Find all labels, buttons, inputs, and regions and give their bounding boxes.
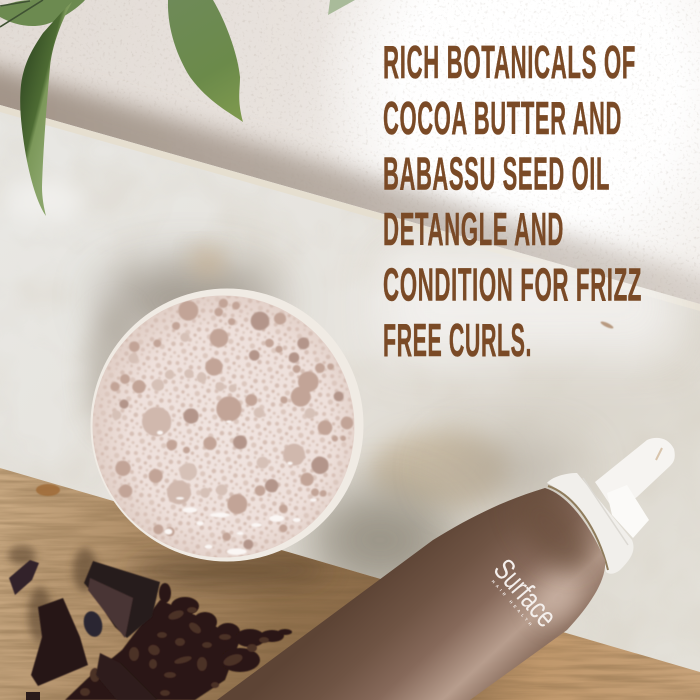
leaf: broad centre — [168, 0, 243, 122]
bottle logo: Surface — [487, 553, 563, 634]
chocolate cast shadows — [8, 545, 97, 643]
bowl rim — [90, 288, 364, 562]
foam bowl — [90, 288, 363, 562]
bottle logo — [485, 553, 563, 635]
leaf: long narrow — [20, 2, 72, 216]
leaf: stem — [0, 0, 43, 27]
bottle body — [217, 488, 605, 700]
bottle collar — [547, 473, 634, 574]
headline text — [383, 36, 642, 366]
dark cocoa bean — [81, 609, 105, 639]
spray bottle — [217, 438, 675, 700]
dark chocolate square — [84, 561, 160, 638]
leaves — [0, 0, 355, 216]
cocoa nib pile — [65, 583, 292, 700]
chocolate crumb — [26, 692, 40, 700]
foam bubbles — [90, 293, 357, 560]
wooden board — [0, 460, 700, 700]
dark chocolate piece left — [31, 598, 88, 686]
bottle collar inner edge — [548, 486, 608, 570]
leaf: pale top tip — [328, 0, 355, 15]
leaf: top left — [0, 0, 85, 26]
cocoa nibs and chocolate — [8, 545, 292, 700]
dark chocolate piece bottom — [96, 653, 157, 700]
headline text: FREE CURLS. — [383, 314, 532, 366]
foam sparkle highlights — [157, 420, 317, 555]
small cocoa chunk — [9, 560, 39, 595]
bottle nozzle — [595, 438, 675, 538]
bottle logo: HAIR HEALTH — [491, 579, 535, 629]
background: upper stone surface — [0, 0, 700, 304]
